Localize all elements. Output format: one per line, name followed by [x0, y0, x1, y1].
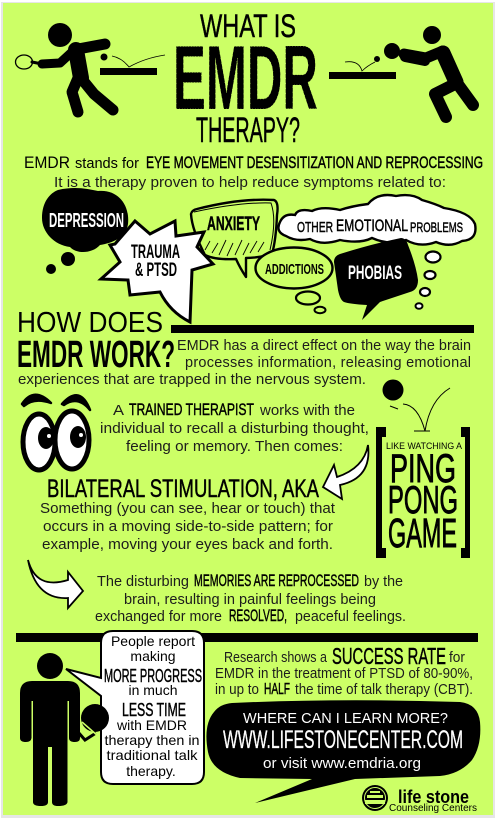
text: success rate: Research shows a: [224, 650, 328, 666]
icon: right table and ball: [329, 56, 396, 79]
text: success rate: for: [449, 650, 465, 666]
icon: person: [20, 653, 80, 806]
speech bubble: more progress: [66, 631, 204, 784]
thought bubble: other emotional problems: EMOTIONAL: [336, 216, 408, 235]
icon: paddle: [78, 704, 109, 740]
title: [173, 8, 318, 150]
intro text: It is a therapy proven to help reduce symptoms related to:: [54, 175, 446, 191]
thought bubble: depression: DEPRESSION: [49, 210, 124, 232]
text: bilateral description: [40, 501, 335, 553]
speech bubble: trauma and ptsd: [101, 221, 213, 322]
text: bilateral description: occurs in a moving side-to-side pattern; for: [43, 519, 333, 535]
text: how emdr works: EMDR has a direct effect on the way the brain: [177, 338, 471, 354]
text: memories reprocessed: [95, 571, 406, 625]
text: memories reprocessed: brain, resulting in painful feelings being: [124, 592, 376, 608]
intro text: [24, 153, 483, 191]
speech bubble: where can i learn more: [206, 700, 480, 803]
text: how emdr works: [18, 338, 471, 388]
text: success rate: the time of talk therapy (CBT).: [295, 682, 473, 698]
icon: ball with bounce lines: [382, 380, 450, 431]
speech bubble: where can i learn more: or visit www.emdria.org: [263, 756, 421, 772]
icon: right ping pong player: [384, 26, 473, 117]
text: how emdr works: experiences that are trapped in the nervous system.: [18, 372, 366, 388]
text: success rate: EMDR in the treatment of PTSD of 80-90%,: [215, 666, 473, 682]
text: how emdr works: processes information, releasing emotional: [185, 355, 471, 371]
speech bubble: more progress: People report: [111, 633, 195, 649]
text: trained therapist: [100, 400, 369, 455]
speech bubble: more progress: MORE PROGRESS: [104, 666, 202, 686]
title: WHAT IS: [200, 8, 296, 44]
speech bubble: phobias: [334, 238, 418, 320]
intro text: stands for: [75, 156, 139, 172]
callout: like watching a ping pong game: LIKE WATCHING A: [386, 441, 463, 452]
text: trained therapist: feeling or memory. Then comes:: [126, 439, 343, 455]
heading: how does emdr work: EMDR WORK?: [17, 334, 175, 376]
heading: bilateral stimulation: BILATERAL STIMULATION, AKA: [47, 475, 319, 503]
text: memories reprocessed: RESOLVED,: [229, 606, 287, 625]
title: THERAPY?: [196, 111, 300, 150]
callout: like watching a ping pong game: [376, 427, 470, 558]
callout: like watching a ping pong game: PING: [390, 447, 456, 491]
speech bubble: more progress: in much: [128, 682, 178, 698]
title: EMDR: [173, 28, 318, 129]
arrow: to reprocessed memories: [28, 560, 83, 608]
logo: life stone counseling centers: life stone: [398, 787, 469, 807]
intro text: EMDR: [24, 153, 70, 172]
text: memories reprocessed: by the: [364, 574, 403, 590]
text: memories reprocessed: exchanged for more: [95, 609, 222, 625]
text: trained therapist: works with the: [259, 403, 355, 419]
speech bubble: more progress: with EMDR: [116, 717, 187, 733]
thought bubble: addictions: [256, 248, 332, 313]
thought bubble: addictions: ADDICTIONS: [265, 261, 324, 278]
speech bubble: more progress: therapy then in: [104, 732, 200, 748]
speech bubble: more progress: traditional talk: [106, 747, 199, 763]
speech bubble: more progress: LESS TIME: [122, 700, 186, 720]
speech bubble: trauma and ptsd: & PTSD: [135, 260, 177, 281]
text: trained therapist: TRAINED THERAPIST: [129, 400, 254, 419]
text: trained therapist: individual to recall a disturbing thought,: [100, 421, 369, 437]
text: bilateral description: example, moving your eyes back and forth.: [42, 537, 333, 553]
thought bubble: depression: [42, 188, 128, 274]
speech bubble: more progress: making: [130, 648, 176, 664]
icon: eyes: [22, 395, 90, 470]
text: memories reprocessed: The disturbing: [97, 574, 189, 590]
thought bubble: other emotional problems: OTHER: [297, 219, 333, 236]
speech bubble: anxiety: [191, 200, 278, 277]
speech bubble: where can i learn more: WHERE CAN I LEARN MORE?: [243, 710, 448, 727]
logo: life stone counseling centers: Counseling Centers: [389, 803, 477, 814]
thought bubble: other emotional problems: [278, 195, 475, 309]
icon: left ping pong player: [16, 23, 113, 112]
logo: life stone counseling centers: [362, 785, 477, 814]
text: memories reprocessed: MEMORIES ARE REPROCESSED: [194, 571, 359, 590]
text: success rate: in up to: [215, 682, 259, 698]
text: trained therapist: A: [113, 403, 124, 419]
speech bubble: more progress: therapy.: [126, 763, 176, 779]
speech bubble: anxiety: ANXIETY: [207, 214, 260, 235]
icon: left table and ball: [100, 54, 165, 75]
speech bubble: phobias: PHOBIAS: [348, 263, 402, 284]
arrow: to bilateral stimulation: [323, 445, 368, 499]
thought bubble: other emotional problems: PROBLEMS: [410, 219, 463, 235]
text: success rate: [215, 643, 473, 698]
heading: how does emdr work: HOW DOES: [17, 307, 163, 339]
text: success rate: HALF: [264, 681, 290, 698]
text: memories reprocessed: peaceful feelings.: [295, 609, 406, 625]
heading: how does emdr work: [17, 307, 175, 376]
text: bilateral description: Something (you can see, hear or touch) that: [40, 501, 335, 517]
speech bubble: trauma and ptsd: TRAUMA: [131, 242, 180, 263]
